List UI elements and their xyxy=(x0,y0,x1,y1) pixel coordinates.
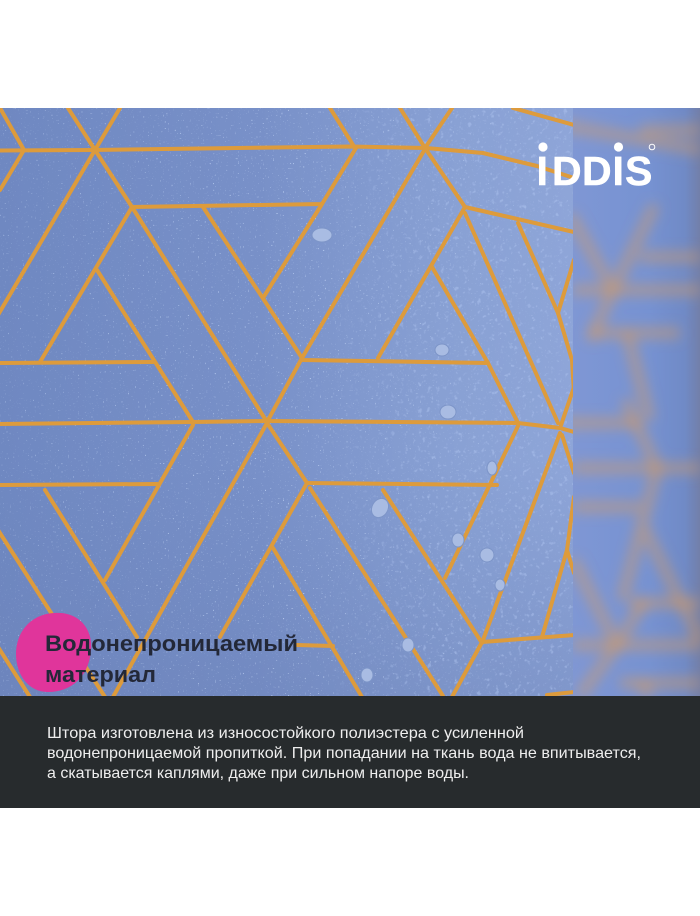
description text: водонепроницаемой пропиткой. При попадании на ткань вода не впитывается, xyxy=(47,745,641,762)
panel: dark description band xyxy=(0,696,700,808)
photo: blurred curtain background xyxy=(560,108,700,696)
gold line pattern xyxy=(0,108,574,697)
description text xyxy=(47,725,641,782)
heading: материал xyxy=(45,662,156,687)
heading xyxy=(45,631,298,687)
description text: Штора изготовлена из износостойкого полиэстера с усиленной xyxy=(47,725,524,742)
photo: curtain fabric in focus with gold geometric pattern xyxy=(0,108,574,697)
water droplet texture xyxy=(0,108,573,696)
description text: а скатывается каплями, даже при сильном напоре воды. xyxy=(47,765,469,782)
large water droplets xyxy=(312,228,505,682)
accent: pink circle behind heading xyxy=(16,613,91,692)
heading: Водонепроницаемый xyxy=(45,631,298,656)
logo: IDDIS: IDDIS xyxy=(536,148,652,194)
fabric base xyxy=(0,108,573,696)
